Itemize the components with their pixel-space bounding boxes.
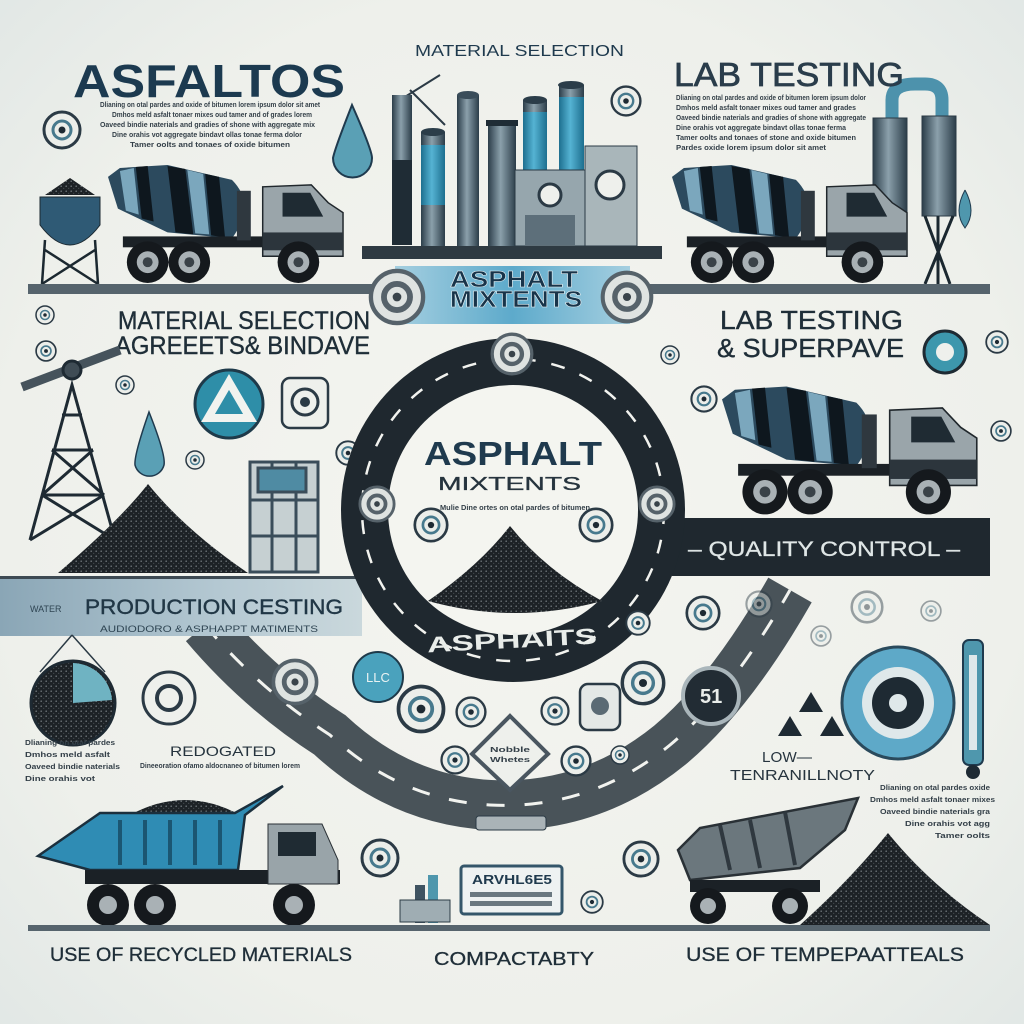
icon: tall water drop [135, 412, 164, 476]
icon: gear badge left [143, 672, 195, 724]
icon: number badge 51: 51 [700, 686, 722, 708]
ring label: asphaits: ASPHAITS [426, 623, 598, 657]
text block: top left greeked copy: Dmhos meld asfalt tonaer mixes oud tamer and of grades lorem [112, 112, 312, 119]
icon: badge beside refinery [612, 87, 640, 115]
ring gravel pile [428, 526, 602, 613]
divider bar top [28, 284, 990, 294]
icon: thermometer [963, 640, 983, 779]
band: production testing [0, 576, 362, 636]
text block: recycled copy: Dine orahis vot [25, 776, 96, 783]
text block: recycled copy: Dineeoration ofamo aldocnaneo of bitumen lorem [140, 763, 300, 770]
text block: right low-temp copy: Dlianing on otal pardes oxide [880, 785, 990, 792]
icons: scattered small right [661, 331, 1011, 441]
icon: blue dump truck [38, 786, 340, 926]
illustration: small lab tower [250, 462, 318, 572]
band: production testing: AUDIODORO & ASPHAPPT MATIMENTS [100, 624, 318, 634]
text block: top left greeked copy: Dine orahis vot aggregate bindavt ollas tonae ferma dolor [112, 132, 302, 139]
text block: top right greeked copy [676, 95, 866, 152]
heading: lab testing superpave: & SUPERPAVE [717, 333, 904, 363]
caption: recycled materials: USE OF RECYCLED MATERIALS [50, 945, 352, 966]
text block: top right greeked copy: Tamer oolts and tonaes of stone and oxide bitumen [676, 135, 856, 142]
illustration: refinery [362, 75, 662, 259]
icon: recycle badge [195, 370, 263, 438]
heading: lab testing: LAB TESTING [674, 56, 904, 93]
text block: recycled copy [25, 740, 300, 783]
icon: mixer truck middle right [722, 386, 977, 514]
heading: material selection aggregates: MATERIAL SELECTION [118, 307, 370, 335]
gravel pile left [58, 484, 248, 573]
icon: mixer truck top right [672, 165, 907, 283]
text block: top left greeked copy: Dlianing on otal pardes and oxide of bitumen lorem ipsum dolor sit amet [100, 102, 321, 109]
icon: teal badge right [924, 331, 966, 373]
text block: top right greeked copy: Dlianing on otal pardes and oxide of bitumen lorem ipsum dolor [676, 95, 866, 102]
icon: number badge 51 [683, 668, 739, 724]
icon: recycle dark triangle [778, 692, 844, 736]
icon: seal badge center: Whetes [490, 757, 530, 764]
faded icons above road right [746, 591, 941, 646]
text block: top right greeked copy: Oaveed bindie naterials and gradies of shone with aggregate [676, 115, 866, 122]
icon: seal badge center [472, 716, 548, 790]
heading: material selection: MATERIAL SELECTION [415, 43, 624, 60]
central ring diagram [341, 334, 685, 682]
banner: asphalt mixtents: MIXTENTS [450, 286, 582, 312]
icon: water drop top [333, 105, 372, 178]
icons: row of center badges: LLC [366, 670, 390, 685]
ring title: ASPHALT [424, 435, 602, 472]
gravel pile bottom right [800, 833, 990, 925]
text block: right low-temp copy: Oaveed bindie naterials gra [880, 809, 990, 816]
text block: right low-temp copy: Dmhos meld asfalt tonaer mixes [870, 797, 995, 804]
text block: top right greeked copy: Dmhos meld asfalt tonaer mixes oud tamer and grades [676, 105, 856, 112]
icon: grey dump truck [678, 798, 858, 924]
caption: compactabty: COMPACTABTY [434, 949, 594, 969]
text block: recycled copy: Dmhos meld asfalt [25, 752, 111, 759]
text block: top left greeked copy [100, 102, 321, 149]
ring badges [360, 334, 674, 541]
ring small text: Mulie Dine ortes on otal pardes of bitumen [440, 505, 590, 512]
heading: recycled: REDOGATED [170, 743, 276, 759]
icon: mixer truck top left [108, 165, 343, 283]
illustration: lab tower and pipe [873, 84, 971, 284]
sign: ARVHL6E5 [461, 866, 562, 914]
heading: material selection aggregates: AGREEETS& BINDAVE [115, 332, 370, 360]
road plate [476, 816, 546, 830]
band: quality control: – QUALITY CONTROL – [688, 538, 960, 561]
text block: top right greeked copy: Pardes oxide lorem ipsum dolor sit amet [676, 145, 827, 152]
caption: temperature materials: USE OF TEMPEPAATTEALS [686, 945, 964, 966]
road: lower curved road [205, 590, 790, 805]
icons: row of center badges [273, 597, 719, 775]
text block: right low-temp copy: Tamer oolts [935, 833, 990, 840]
band: production testing: PRODUCTION CESTING [85, 596, 343, 619]
icon: target gauge [842, 647, 954, 759]
sign: ARVHL6E5: ARVHL6E5 [472, 872, 552, 887]
heading: low temperature: TENRANILLNOTY [730, 767, 875, 784]
heading: lab testing superpave: LAB TESTING [720, 305, 903, 335]
banner: asphalt mixtents [371, 266, 651, 324]
icon: seal badge center: Nobble [490, 747, 530, 754]
icon: left badge [44, 112, 80, 148]
band: quality control [672, 518, 990, 576]
text block: right low-temp copy [870, 785, 995, 840]
icons: scattered small left [36, 306, 360, 469]
text block: right low-temp copy: Dine orahis vot agg [905, 821, 990, 828]
icon: gravel magnifier left [31, 635, 115, 745]
heading: material selection aggregates [115, 307, 370, 360]
banner: asphalt mixtents: ASPHALT [450, 266, 578, 292]
heading: low temperature: LOW— [762, 749, 812, 766]
text block: top left greeked copy: Oaveed bindie naterials and gradies of shone with aggregate mix [100, 122, 315, 129]
heading: lab testing superpave [717, 305, 904, 363]
icon: oil derrick [22, 350, 120, 540]
text block: top left greeked copy: Tamer oolts and tonaes of oxide bitumen [130, 142, 290, 149]
divider bar bottom [28, 925, 990, 931]
band: production testing: WATER [30, 604, 62, 614]
text block: recycled copy: Oaveed bindie naterials [25, 764, 120, 771]
icon: storage tank left [40, 178, 100, 284]
title: Asfaltos: ASFALTOS [73, 55, 345, 107]
text block: recycled copy: Dlianing on otal pardes [25, 740, 115, 747]
icon: square gauge badge [282, 378, 328, 428]
icons: bottom center [362, 840, 658, 923]
text block: top right greeked copy: Dine orahis vot aggregate bindavt ollas tonae ferma [676, 125, 846, 132]
ring subtitle: MIXTENTS [438, 474, 581, 494]
heading: low temperature [730, 749, 875, 784]
